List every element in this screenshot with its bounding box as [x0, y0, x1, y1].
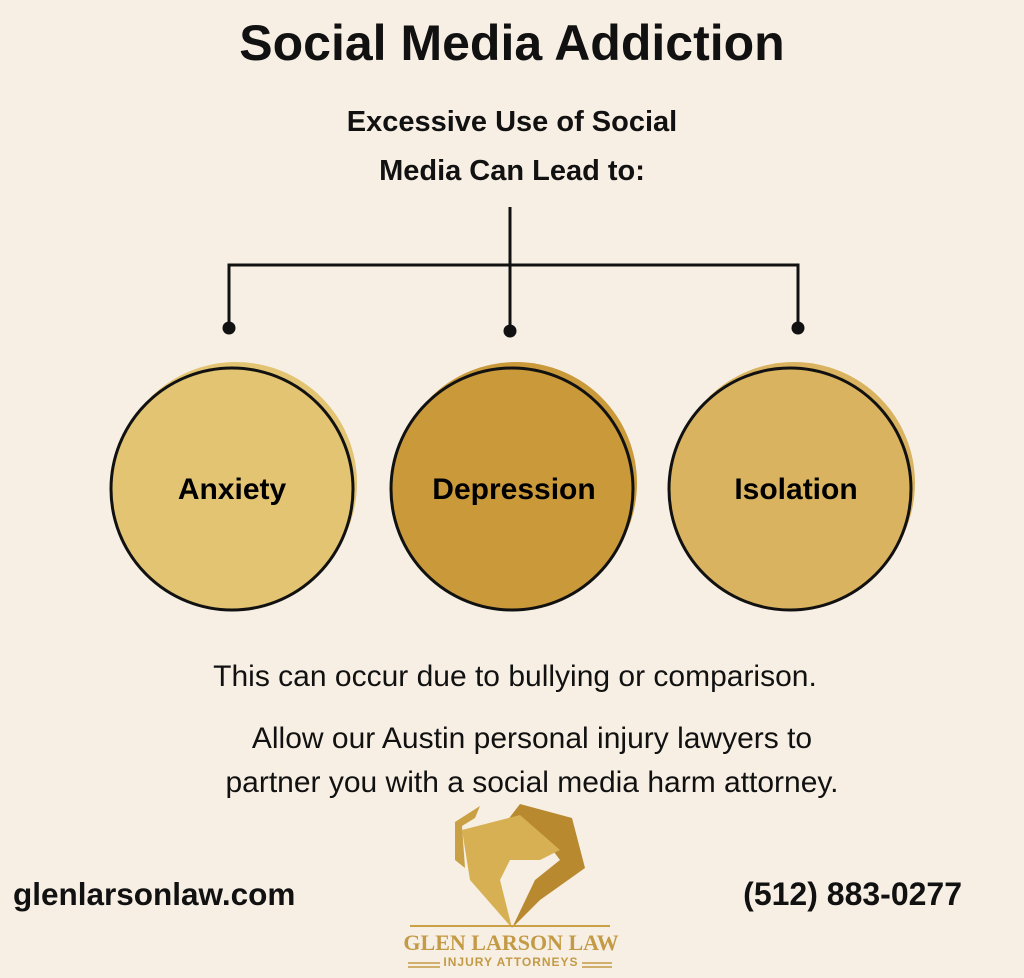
circle: depression: [391, 362, 637, 610]
subtitle: Media Can Lead to:: [379, 155, 645, 187]
circle: anxiety: Anxiety: [178, 473, 286, 506]
logo: INJURY ATTORNEYS: [443, 955, 579, 969]
phone: (512) 883-0277: [743, 876, 962, 912]
text: call to action: Allow our Austin personal injury lawyers to: [252, 722, 812, 755]
logo: GLEN LARSON LAW: [403, 930, 619, 955]
circle: isolation: [669, 362, 915, 610]
subtitle: Excessive Use of Social: [347, 106, 677, 138]
subtitle: [347, 106, 677, 187]
logo: [403, 804, 619, 969]
title: Social Media Addiction: [239, 15, 785, 71]
text: call to action: partner you with a social media harm attorney.: [225, 766, 839, 799]
text: cause: This can occur due to bullying or comparison.: [213, 660, 817, 693]
circle: isolation: Isolation: [734, 473, 858, 506]
text: call to action: [225, 722, 839, 799]
website: glenlarsonlaw.com: [13, 876, 295, 912]
circle: anxiety: [111, 362, 357, 610]
circle: depression: Depression: [432, 473, 596, 506]
